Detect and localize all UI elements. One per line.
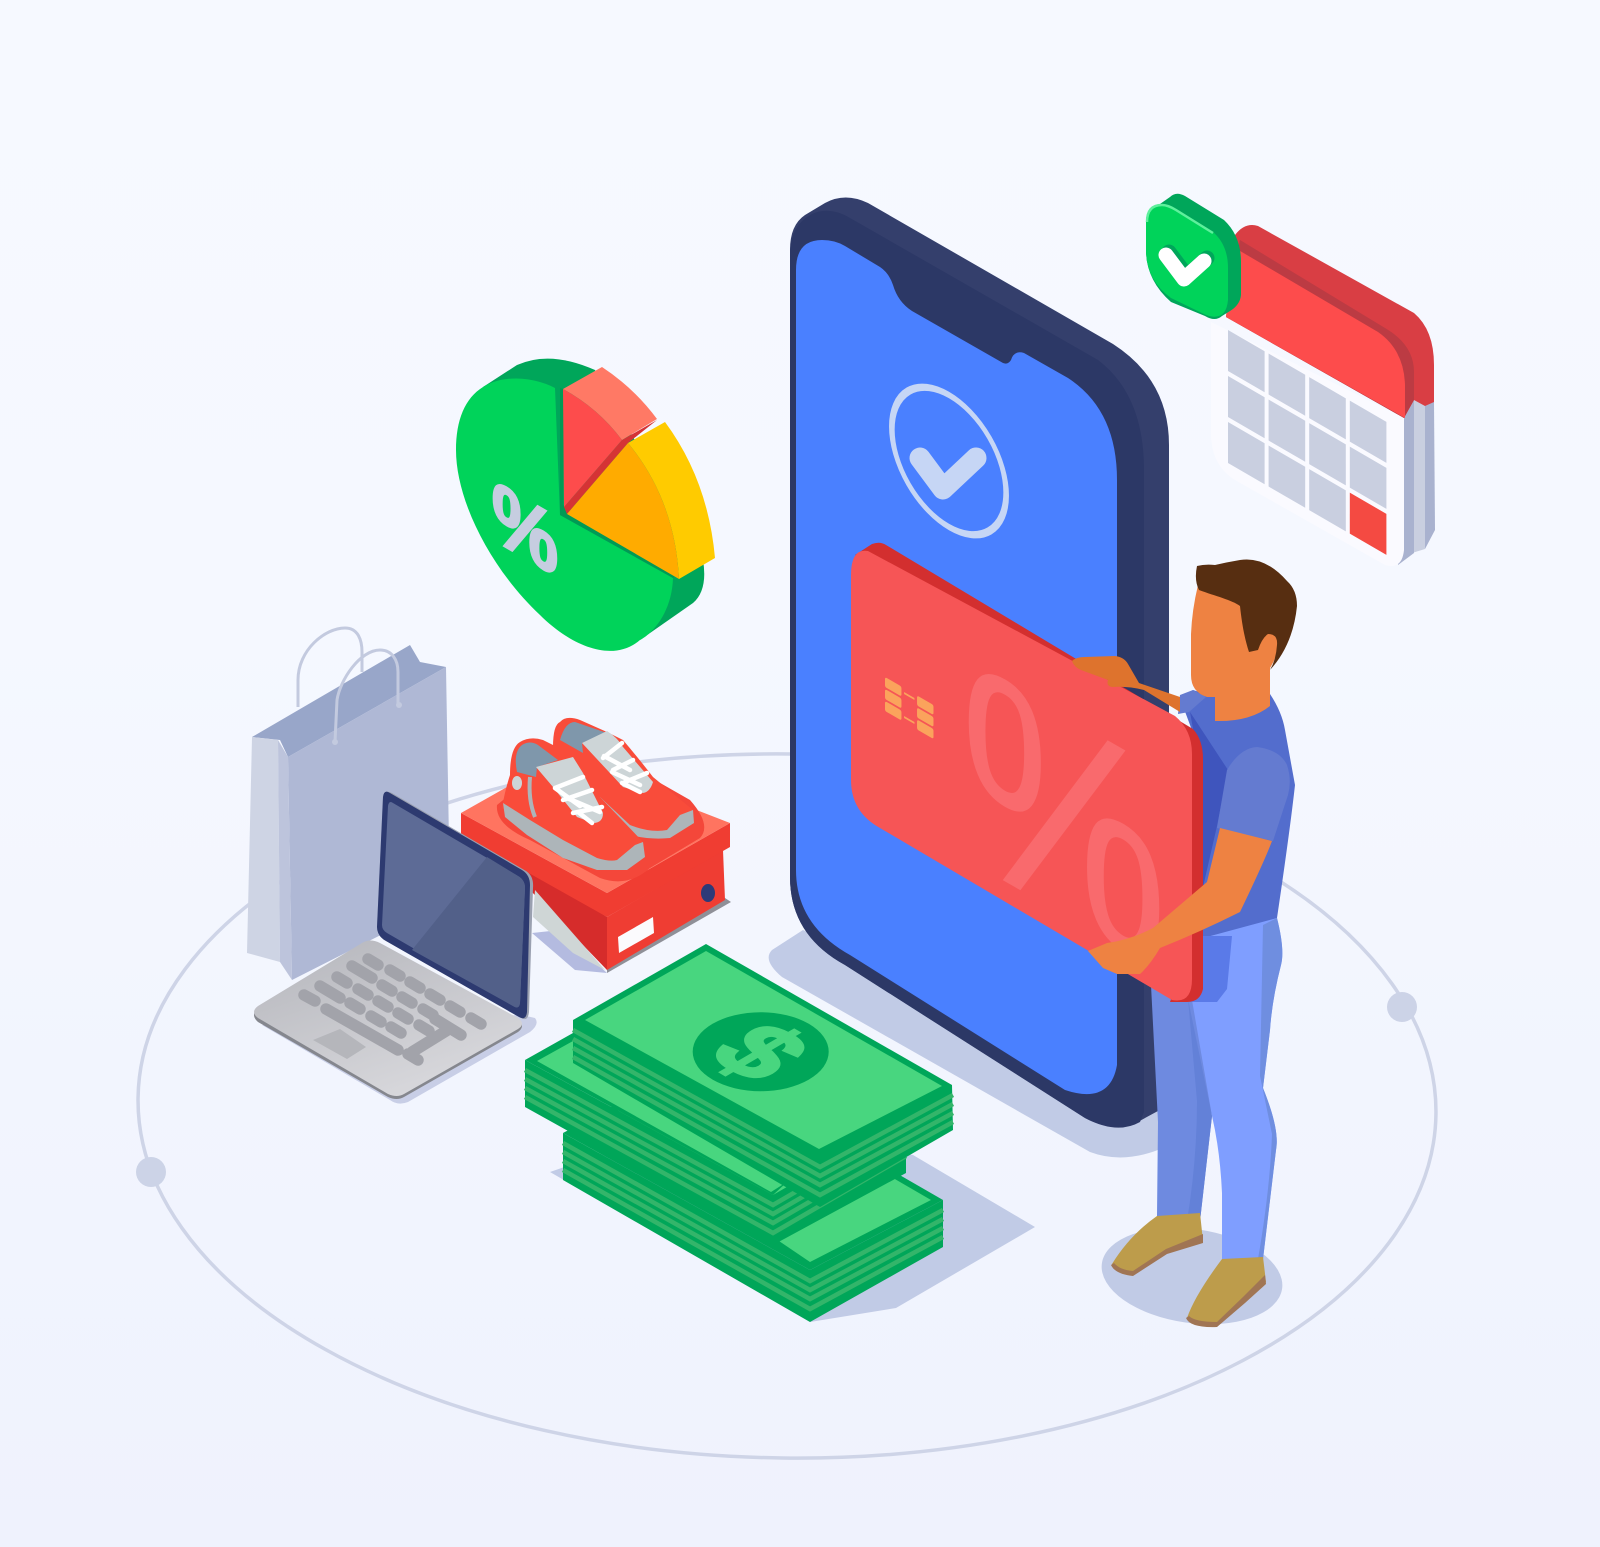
bag side	[247, 737, 280, 962]
top cash stack	[573, 944, 953, 1207]
yellow slice	[567, 422, 715, 579]
laptop screen	[377, 792, 533, 1019]
card edge	[855, 543, 1203, 1002]
box flap	[533, 890, 605, 970]
back pages	[1425, 400, 1435, 549]
money shadow	[550, 1120, 1035, 1322]
calendar header back	[1226, 225, 1434, 418]
box label	[618, 917, 654, 953]
laptop shadow	[262, 1015, 537, 1104]
person lower body and ground shadow	[1095, 690, 1295, 1335]
person upper body	[1072, 559, 1297, 974]
laptop base	[254, 942, 522, 1099]
wedge cutout	[560, 388, 680, 578]
box shadow	[532, 930, 607, 973]
check badge	[1146, 194, 1241, 319]
box right side	[607, 850, 725, 970]
bottom cash stack	[563, 1060, 943, 1322]
discount credit card	[851, 543, 1203, 1037]
person shirt	[1180, 690, 1295, 938]
pie side	[483, 359, 704, 640]
box lid	[461, 813, 607, 917]
smartphone	[790, 198, 1169, 1128]
highlighted date	[1350, 493, 1386, 555]
box hole	[701, 884, 715, 902]
money stacks	[525, 944, 1035, 1322]
calendar	[1146, 194, 1435, 566]
sleeve	[1178, 690, 1206, 714]
hair	[1196, 559, 1297, 670]
trackpad	[313, 1029, 366, 1059]
shoe box with sneakers	[461, 718, 731, 973]
phone body	[790, 198, 1169, 1126]
box left side	[520, 860, 607, 970]
calendar header mid	[1226, 240, 1414, 418]
left shoe	[1111, 1213, 1203, 1276]
dollar coin	[693, 1012, 829, 1091]
phone screen	[796, 240, 1117, 1094]
bag inner top	[252, 645, 446, 757]
foot shadow	[1095, 1217, 1289, 1335]
bag back handle	[298, 628, 362, 707]
middle cash stack	[525, 1033, 906, 1245]
calendar page	[1211, 322, 1404, 566]
shopping bag	[247, 628, 450, 980]
keyboard	[304, 959, 481, 1060]
percent sign: %	[492, 462, 558, 596]
laptop	[254, 792, 537, 1104]
pie face	[456, 378, 673, 651]
dollar sign: $	[685, 1009, 835, 1096]
bag front face	[288, 667, 450, 980]
red slice	[563, 367, 657, 514]
right sneaker	[553, 718, 694, 839]
shirt sleeve	[1217, 747, 1290, 841]
upper arm and hand	[1072, 656, 1180, 712]
phone inner bezel	[790, 211, 1144, 1128]
right shoe	[1186, 1257, 1266, 1327]
check badge on screen	[892, 362, 1006, 560]
calendar header front	[1226, 248, 1405, 418]
phone shadow	[769, 930, 1165, 1157]
person left leg	[1151, 985, 1212, 1221]
card face	[851, 551, 1192, 1001]
shoe recess on lid	[497, 760, 704, 881]
chip	[885, 677, 933, 739]
orbit ring with nodes	[134, 746, 1440, 1466]
left sneaker	[502, 738, 645, 870]
forearm and hand	[1088, 828, 1272, 974]
pie chart	[456, 359, 715, 651]
bag front handle	[335, 650, 398, 742]
neck and head	[1191, 585, 1279, 721]
percent on card: %	[960, 593, 1168, 1037]
person right leg	[1192, 918, 1282, 1262]
date grid	[1228, 330, 1386, 555]
